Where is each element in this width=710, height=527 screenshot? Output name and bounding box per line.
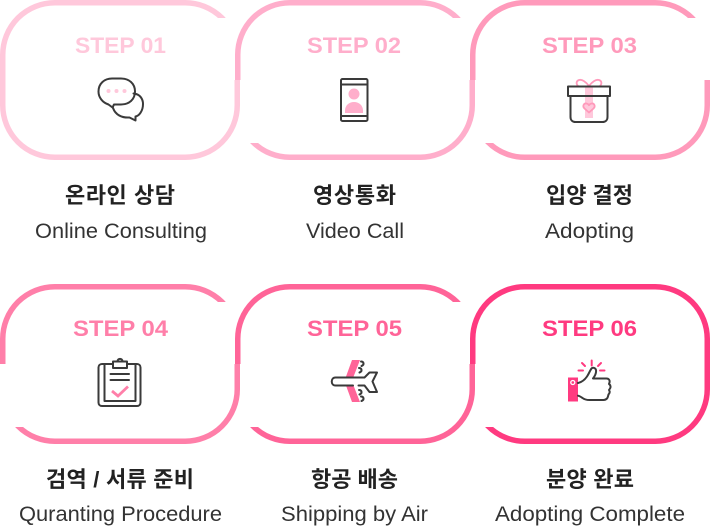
panel: step 03 adopting [473, 3, 707, 243]
step 05 frame [238, 287, 472, 441]
step 05 english title: Shipping by Air [281, 503, 428, 526]
panel: step 01 online consulting [3, 3, 237, 243]
panel: step 02 video call [238, 3, 472, 243]
step 01 korean title: 온라인 상담 [65, 183, 175, 208]
panel: step 06 adopting complete [473, 287, 707, 526]
step 06 korean title: 분양 완료 [546, 467, 634, 492]
step 02 korean title: 영상통화 [313, 183, 396, 208]
icon: airplane [332, 360, 377, 402]
step 03 frame [473, 3, 707, 157]
step 05 korean title: 항공 배송 [311, 467, 398, 492]
step 03 heading: STEP 03 [542, 33, 637, 58]
step 06 frame [473, 287, 707, 441]
step 04 heading: STEP 04 [73, 316, 169, 341]
step 03 english title: Adopting [545, 220, 634, 243]
step 06 heading: STEP 06 [542, 316, 637, 341]
panel: step 05 shipping by air [238, 287, 472, 526]
step 01 heading: STEP 01 [75, 33, 166, 58]
step 05 heading: STEP 05 [307, 316, 402, 341]
step 04 korean title: 검역 / 서류 준비 [46, 467, 194, 492]
icon: chat bubbles [98, 78, 143, 120]
step 04 english title: Quranting Procedure [19, 503, 222, 526]
step 04 frame [3, 287, 237, 441]
icon: gift box [568, 80, 610, 122]
icon: smartphone with person [341, 79, 368, 121]
icon: clipboard with check [98, 359, 140, 406]
icon: thumbs up [568, 360, 611, 402]
step 02 english title: Video Call [306, 220, 404, 243]
step 01 frame [3, 3, 237, 157]
step 03 korean title: 입양 결정 [546, 183, 633, 208]
panel: step 04 quarantine procedure [3, 287, 237, 526]
step 02 heading: STEP 02 [307, 33, 401, 58]
step 01 english title: Online Consulting [35, 220, 207, 243]
step 06 english title: Adopting Complete [495, 503, 685, 526]
step 02 frame [238, 3, 472, 157]
